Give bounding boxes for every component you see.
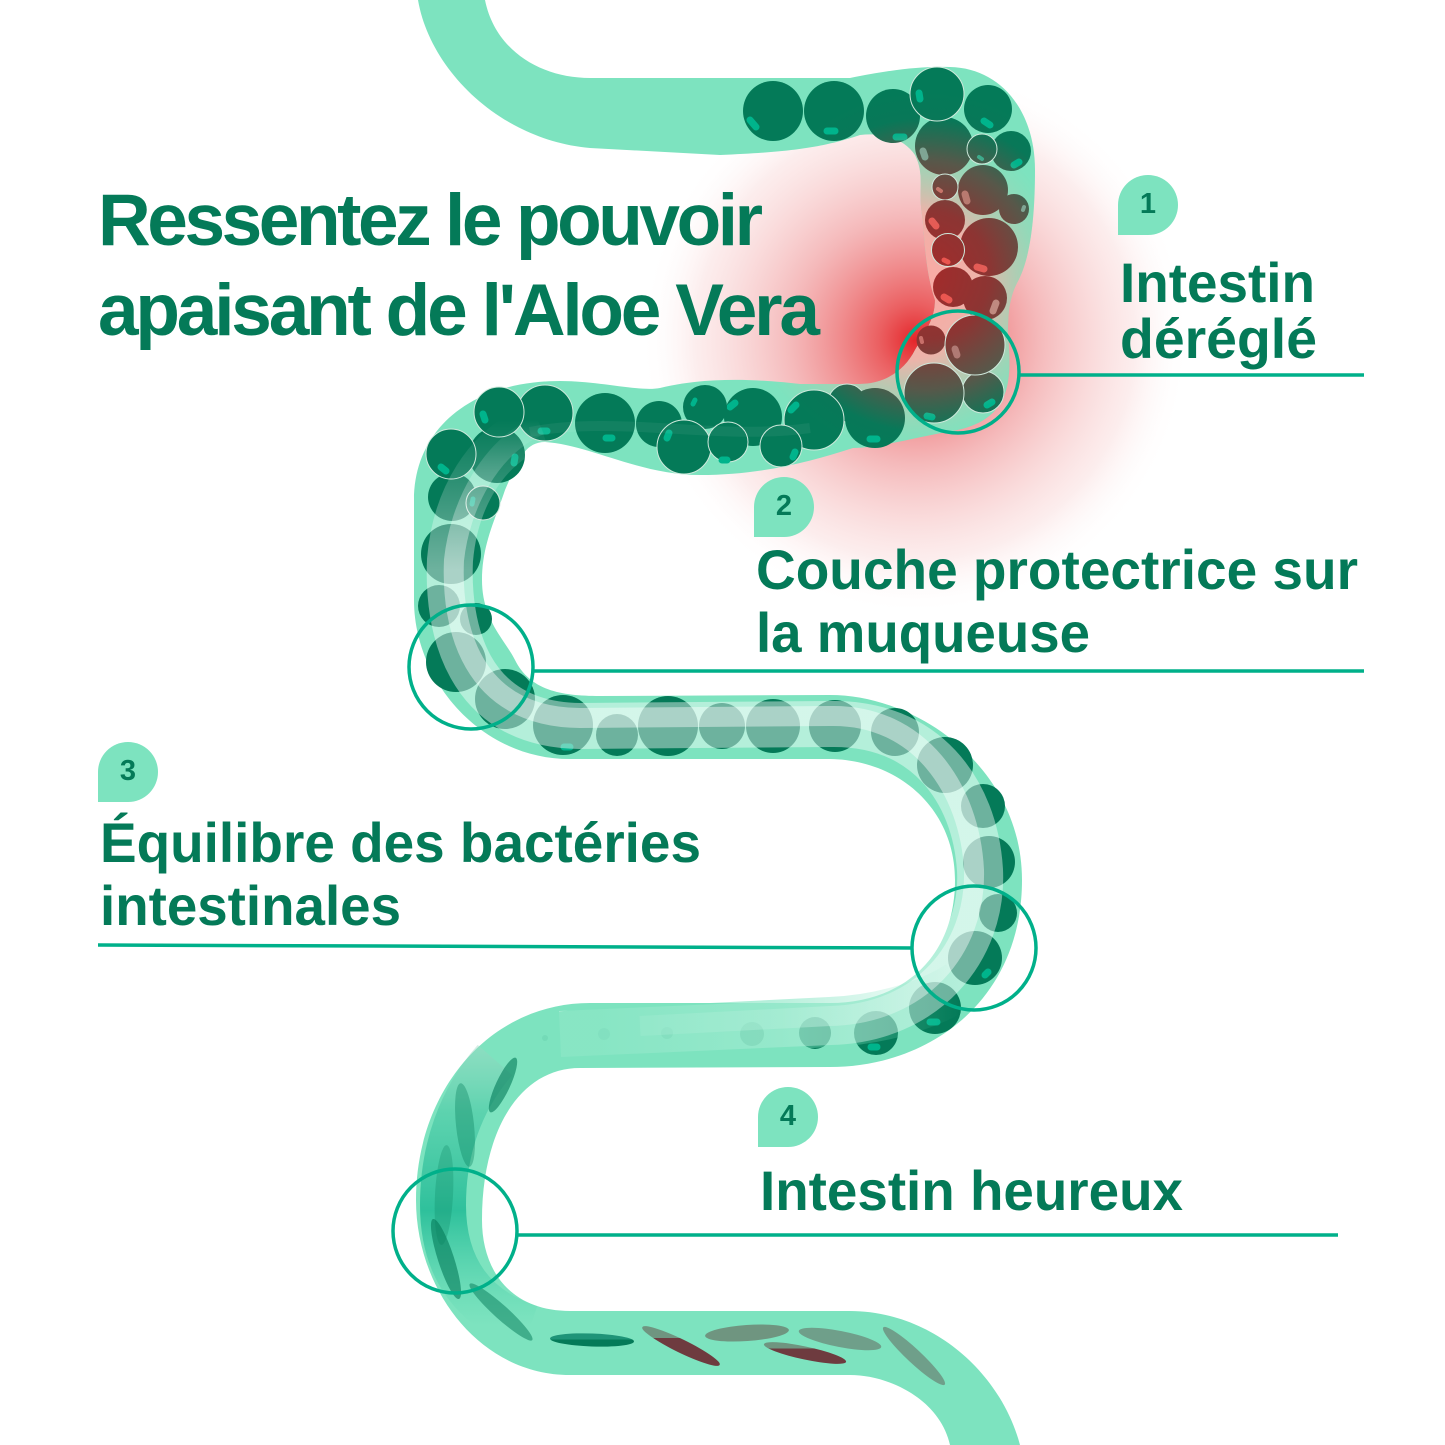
callout 1: dysregulated gut: Intestin	[1120, 251, 1315, 314]
deeper teal lining, lower section	[443, 1060, 530, 1328]
callout 4: happy gut	[393, 1087, 1338, 1293]
callout 2: protective layer: la muqueuse	[756, 601, 1090, 664]
title: Ressentez le pouvoir	[98, 180, 763, 261]
intestine tube	[414, 0, 1050, 1445]
callout 3: bacterial balance: intestinales	[100, 874, 401, 937]
title: apaisant de l'Aloe Vera	[98, 270, 821, 351]
callout 4: happy gut: 4	[780, 1100, 796, 1132]
callout 2: protective layer	[409, 477, 1364, 729]
bacteria spheres: second section	[426, 384, 905, 521]
callout 3: bacterial balance: 3	[120, 755, 136, 787]
callout 2: protective layer: Couche protectrice sur	[756, 538, 1358, 601]
callout 1: dysregulated gut: déréglé	[1120, 307, 1317, 370]
title	[98, 180, 821, 351]
red inflammation glow	[640, 65, 1190, 615]
callout 3: bacterial balance	[98, 742, 1036, 1010]
callout 1: dysregulated gut: 1	[1140, 188, 1156, 220]
bacteria spheres: irritated section	[743, 67, 1031, 423]
bacteria spheres: third section	[418, 524, 1017, 1055]
callout 2: protective layer: 2	[776, 490, 792, 522]
callout 3: bacterial balance: Équilibre des bactéries	[100, 811, 701, 874]
aloe vera protective coating	[450, 425, 980, 1055]
healthy flat bacteria	[425, 1055, 949, 1390]
callout 4: happy gut: Intestin heureux	[760, 1159, 1183, 1222]
callout 1: dysregulated gut	[897, 175, 1364, 433]
